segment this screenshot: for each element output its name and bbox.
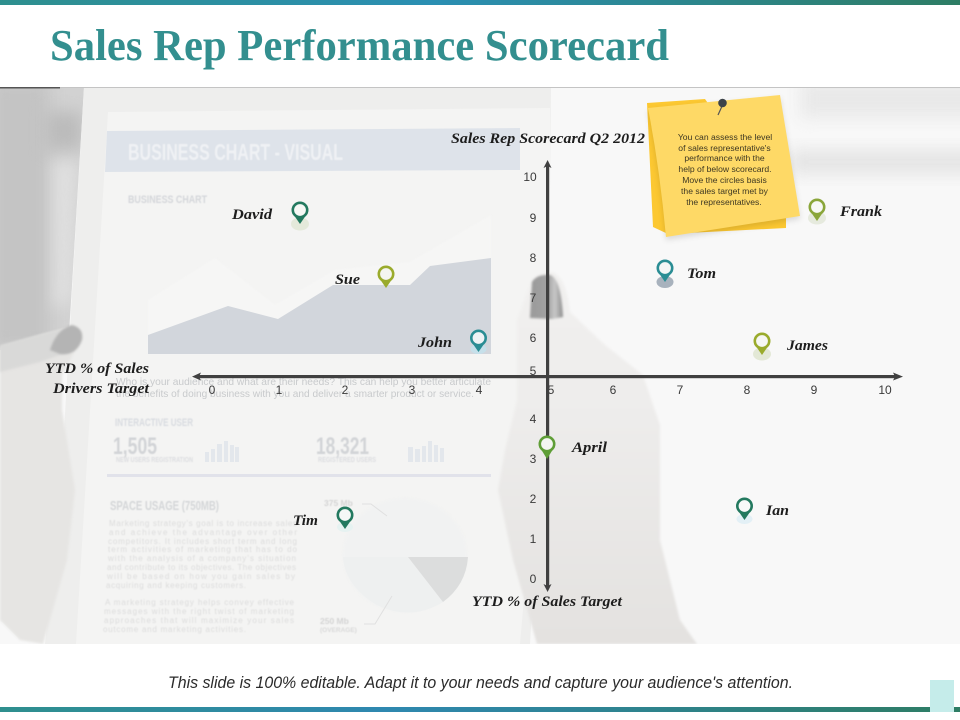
marker: Tim — [293, 508, 353, 532]
background photo: hands holding a tablet: REGISTERED USERS — [318, 457, 376, 464]
vertical axis: YTD % of Sales Target: 2 — [530, 492, 537, 506]
background photo: hands holding a tablet: Marketing strategy's goal is to increase sales — [109, 519, 297, 528]
marker: April — [540, 437, 607, 459]
horizontal axis: YTD % of Sales Drivers Target: 5 — [548, 383, 555, 397]
background photo: hands holding a tablet: outcome and marketing activities. — [103, 625, 246, 634]
background photo: hands holding a tablet: 375 Mb — [324, 498, 353, 508]
note text — [678, 132, 772, 207]
horizontal axis: YTD % of Sales Drivers Target: 0 — [209, 383, 216, 397]
horizontal axis: YTD % of Sales Drivers Target: 7 — [677, 383, 684, 397]
footer note: This slide is 100% editable. Adapt it to your needs and capture your audience's attention. — [168, 673, 793, 692]
background photo: hands holding a tablet: INTERACTIVE USER — [115, 417, 193, 429]
vertical axis: YTD % of Sales Target: 7 — [530, 291, 537, 305]
background photo: hands holding a tablet: BUSINESS CHART — [128, 194, 207, 206]
marker: Sue — [335, 267, 393, 288]
background photo: hands holding a tablet: will be based on how you gain sales by — [106, 572, 295, 581]
marker: Frank: Frank — [839, 204, 883, 220]
marker: John: John — [417, 335, 452, 351]
horizontal axis: YTD % of Sales Drivers Target: 3 — [409, 383, 416, 397]
background photo: hands holding a tablet: the benefits of doing business with you and deliver a smarter product or service. — [116, 388, 474, 400]
horizontal axis: YTD % of Sales Drivers Target: 10 — [878, 383, 892, 397]
vertical axis: YTD % of Sales Target: 3 — [530, 452, 537, 466]
note text: of sales representative's — [678, 143, 771, 153]
background photo: hands holding a tablet: acquiring and keeping customers. — [106, 581, 246, 590]
background photo: hands holding a tablet: Who is your audience and what are their needs? This can help you better articulate — [116, 376, 491, 388]
vertical axis: YTD % of Sales Target: 8 — [530, 251, 537, 265]
slide number box — [930, 680, 954, 712]
marker: Tim: Tim — [293, 513, 318, 529]
background photo: hands holding a tablet: 250 Mb — [320, 616, 349, 626]
horizontal axis: YTD % of Sales Drivers Target: 1 — [276, 383, 283, 397]
marker: David: David — [231, 207, 273, 223]
background photo: hands holding a tablet: A marketing strategy helps convey effective — [105, 598, 295, 607]
vertical axis title: YTD % of Sales Target — [472, 594, 623, 610]
horizontal axis: YTD % of Sales Drivers Target: 9 — [811, 383, 818, 397]
horizontal axis: YTD % of Sales Drivers Target — [192, 372, 903, 397]
background photo: hands holding a tablet: (OVERAGE) — [320, 627, 357, 634]
bottom gradient bar — [0, 707, 960, 712]
background photo: hands holding a tablet: competitors. It includes short term and long — [108, 537, 297, 546]
background photo: hands holding a tablet: term activities of marketing that has to do — [108, 545, 298, 554]
horizontal axis title: Drivers Target — [52, 381, 150, 397]
vertical axis: YTD % of Sales Target: 9 — [530, 211, 537, 225]
marker: John — [417, 331, 486, 354]
marker: Frank — [808, 200, 883, 224]
note text: the representatives. — [686, 197, 762, 207]
horizontal axis: YTD % of Sales Drivers Target: 4 — [476, 383, 483, 397]
note text: help of below scorecard. — [678, 164, 772, 174]
horizontal axis: YTD % of Sales Drivers Target: 2 — [342, 383, 349, 397]
marker: April: April — [571, 440, 607, 456]
vertical axis: YTD % of Sales Target: 1 — [530, 532, 537, 546]
background photo: hands holding a tablet: approaches that will maximize your sales — [104, 616, 294, 625]
background photo: hands holding a tablet — [0, 80, 960, 644]
note text: Move the circles basis — [682, 175, 767, 185]
horizontal axis: YTD % of Sales Drivers Target: 6 — [610, 383, 617, 397]
marker: Sue: Sue — [335, 272, 361, 288]
chart heading: Sales Rep Scorecard Q2 2012 — [451, 131, 645, 147]
horizontal axis: YTD % of Sales Drivers Target: 8 — [744, 383, 751, 397]
marker: Ian — [736, 499, 789, 524]
sticky note — [647, 95, 800, 237]
background photo: hands holding a tablet: and contribute to its objectives. The objectives — [107, 563, 296, 572]
background photo: hands holding a tablet: with the analysis of a company's situation — [107, 554, 296, 563]
note text: You can assess the level — [678, 132, 772, 142]
marker: David — [231, 203, 309, 230]
background photo: hands holding a tablet: BUSINESS CHART - VISUAL — [128, 139, 343, 165]
title: Sales Rep Performance Scorecard — [50, 21, 669, 70]
vertical axis: YTD % of Sales Target: 6 — [530, 331, 537, 345]
horizontal axis title — [45, 361, 150, 397]
background photo: hands holding a tablet: NEW USERS REGISTRATION — [116, 457, 193, 464]
note text: the sales target met by — [681, 186, 769, 196]
marker: James — [753, 334, 828, 360]
background photo: hands holding a tablet: SPACE USAGE (750MB) — [110, 498, 219, 513]
note text: performance with the — [684, 153, 765, 163]
marker: Ian: Ian — [765, 503, 789, 519]
vertical axis: YTD % of Sales Target — [523, 160, 552, 592]
vertical axis: YTD % of Sales Target: 0 — [530, 572, 537, 586]
background photo: hands holding a tablet: messages with the right twist of marketing — [104, 607, 294, 616]
background photo: hands holding a tablet: 18,321 — [316, 433, 369, 460]
background photo: hands holding a tablet: and achieve the advantage over other — [109, 528, 297, 537]
vertical axis: YTD % of Sales Target: 10 — [523, 170, 537, 184]
vertical axis: YTD % of Sales Target: 5 — [530, 364, 537, 378]
background photo: hands holding a tablet: 1,505 — [113, 433, 157, 460]
marker: Tom: Tom — [687, 266, 716, 282]
horizontal axis title: YTD % of Sales — [45, 361, 149, 377]
marker: James: James — [786, 338, 828, 354]
icon: pushpin — [718, 99, 727, 115]
top gradient bar — [0, 0, 960, 5]
marker: Tom — [656, 261, 716, 288]
vertical axis: YTD % of Sales Target: 4 — [530, 412, 537, 426]
